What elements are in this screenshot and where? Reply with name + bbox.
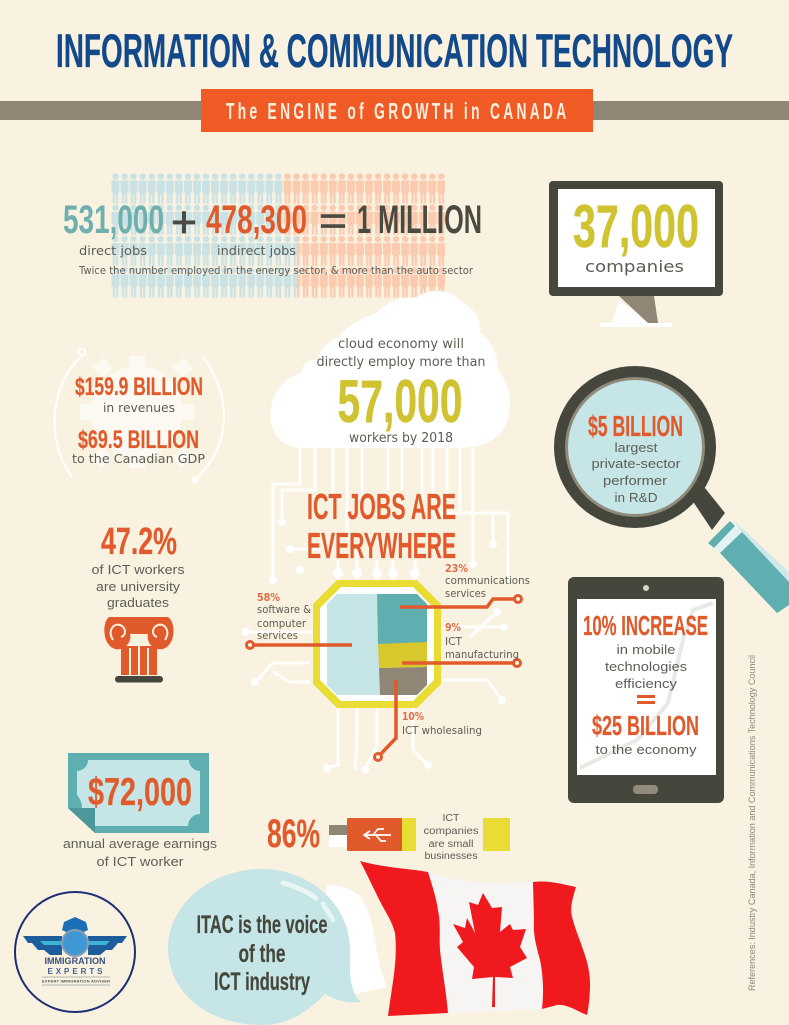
panel: university graduates: are university	[96, 579, 181, 594]
panel: small businesses USB: ICT	[442, 813, 460, 824]
label: software: software &	[257, 604, 311, 616]
icon: gear and arrows	[55, 348, 224, 484]
equation: +	[171, 198, 197, 247]
globe	[62, 930, 88, 956]
panel: monitor 37,000 companies: companies	[585, 257, 684, 276]
panel: jobs equation	[63, 173, 482, 299]
label: communications	[445, 563, 530, 600]
segment: software 58%	[327, 594, 380, 695]
label: manufacturing	[445, 622, 519, 661]
wings	[23, 936, 127, 955]
panel: magnifying glass: performer	[603, 473, 668, 488]
panel: monitor 37,000 companies	[549, 181, 723, 327]
chip frame	[313, 580, 441, 708]
logo: Immigration Experts: EXPERTS	[48, 967, 103, 976]
logo: Immigration Experts: IMMIGRATION	[44, 956, 106, 966]
panel: revenue and GDP	[55, 348, 224, 484]
panel: monitor 37,000 companies: 37,000	[573, 193, 699, 260]
panel: tablet	[568, 577, 724, 803]
panel: ICT jobs heading: ICT JOBS ARE	[307, 486, 456, 527]
panel: university graduates: of ICT workers	[92, 562, 185, 577]
label: direct jobs: direct jobs	[79, 243, 147, 258]
text: workers by 2018	[349, 431, 453, 446]
panel: university graduates: 47.2%	[101, 521, 177, 563]
label: communications: services	[445, 588, 486, 600]
segment: manufacturing 9%	[378, 642, 427, 668]
label: manufacturing: 9%	[445, 622, 461, 634]
panel: annual earnings banknote: $72,000	[88, 771, 192, 814]
label: manufacturing: ICT	[445, 636, 463, 648]
panel: annual earnings banknote: of ICT worker	[96, 854, 184, 869]
panel: magnifying glass: in R&D	[614, 490, 658, 505]
panel: ICT jobs heading	[307, 486, 456, 566]
chart: chip sector breakdown	[246, 563, 530, 760]
text: directly employ more than	[316, 355, 486, 370]
note: Twice the number employed in the energy sector, & more than the auto sector	[78, 265, 474, 277]
text: 57,000	[338, 368, 462, 435]
references: References: Industry Canada, Information and Communications Technology Council	[747, 655, 757, 991]
label: wholesaling: 10%	[402, 711, 424, 723]
subtitle banner	[0, 89, 789, 132]
logo: Immigration Experts	[15, 892, 135, 1012]
icon: USB drive	[329, 818, 510, 851]
icon: cloud	[270, 291, 510, 448]
panel: university graduates	[92, 521, 185, 682]
label: communications: communications	[445, 575, 530, 587]
equation: 478,300	[206, 198, 307, 242]
panel: small businesses USB: companies	[424, 826, 478, 837]
label: software: 58%	[257, 592, 280, 604]
panel: tablet: efficiency	[615, 676, 678, 691]
panel: revenue and GDP: to the Canadian GDP	[72, 451, 205, 466]
panel: small businesses USB	[267, 812, 510, 862]
text: cloud economy will	[338, 337, 464, 352]
panel: ITAC speech bubble	[168, 869, 387, 1025]
leader lines	[246, 596, 522, 760]
label: software	[257, 592, 311, 642]
icon: handle	[692, 488, 789, 613]
equation: 531,000	[63, 198, 164, 242]
panel: ITAC speech bubble: ICT industry	[214, 968, 310, 996]
panel: small businesses USB: are small	[428, 839, 474, 850]
panel: tablet: to the economy	[596, 742, 697, 757]
icon: ionic column	[104, 617, 173, 682]
logo: Immigration Experts: EXPERT IMMIGRATION ADVISER	[42, 978, 110, 984]
icon: Canadian flag	[360, 861, 590, 1016]
panel: annual earnings banknote: annual average earnings	[63, 836, 218, 851]
panel: cloud economy	[270, 291, 510, 448]
panel: revenue and GDP: in revenues	[103, 400, 175, 415]
panel: ITAC speech bubble: of the	[238, 940, 286, 968]
panel: small businesses USB: 86%	[267, 812, 320, 856]
circuit traces	[242, 448, 508, 774]
label: software: services	[257, 630, 298, 642]
label: manufacturing: manufacturing	[445, 649, 519, 661]
panel: magnifying glass: largest	[614, 440, 658, 455]
equation: =	[319, 199, 347, 243]
line chart decoration	[580, 603, 713, 768]
label: indirect jobs: indirect jobs	[217, 243, 296, 258]
maple leaf	[453, 893, 527, 1007]
label: communications: 23%	[445, 563, 468, 575]
equation	[63, 198, 482, 247]
panel: ICT jobs heading: EVERYWHERE	[307, 525, 456, 566]
equals sign	[637, 696, 655, 702]
text	[316, 337, 486, 446]
panel: magnifying glass: $5 BILLION	[588, 411, 683, 443]
label: wholesaling	[402, 711, 482, 737]
panel: annual earnings banknote	[63, 753, 218, 869]
label: wholesaling: ICT wholesaling	[402, 725, 482, 737]
icon: crowd of people	[111, 173, 445, 299]
panel: revenue and GDP: $69.5 BILLION	[78, 426, 199, 454]
panel: revenue and GDP: $159.9 BILLION	[75, 373, 203, 401]
subtitle banner: The ENGINE of GROWTH in CANADA	[226, 100, 566, 125]
panel: tablet: 10% INCREASE	[583, 610, 708, 641]
equation: 1 MILLION	[357, 198, 482, 242]
label: software: computer	[257, 618, 307, 630]
panel: tablet: $25 BILLION	[592, 710, 699, 741]
panel: magnifying glass	[554, 366, 789, 613]
segment: wholesaling 10%	[379, 667, 427, 695]
panel: magnifying glass: private-sector	[592, 456, 681, 471]
panel: tablet: technologies	[605, 659, 688, 674]
panel: ITAC speech bubble: ITAC is the voice	[196, 911, 328, 939]
panel: university graduates: graduates	[107, 595, 170, 610]
panel: small businesses USB: businesses	[424, 851, 478, 862]
crest	[62, 917, 88, 936]
segment: communications 23%	[377, 594, 427, 644]
panel: tablet: in mobile	[616, 642, 676, 657]
